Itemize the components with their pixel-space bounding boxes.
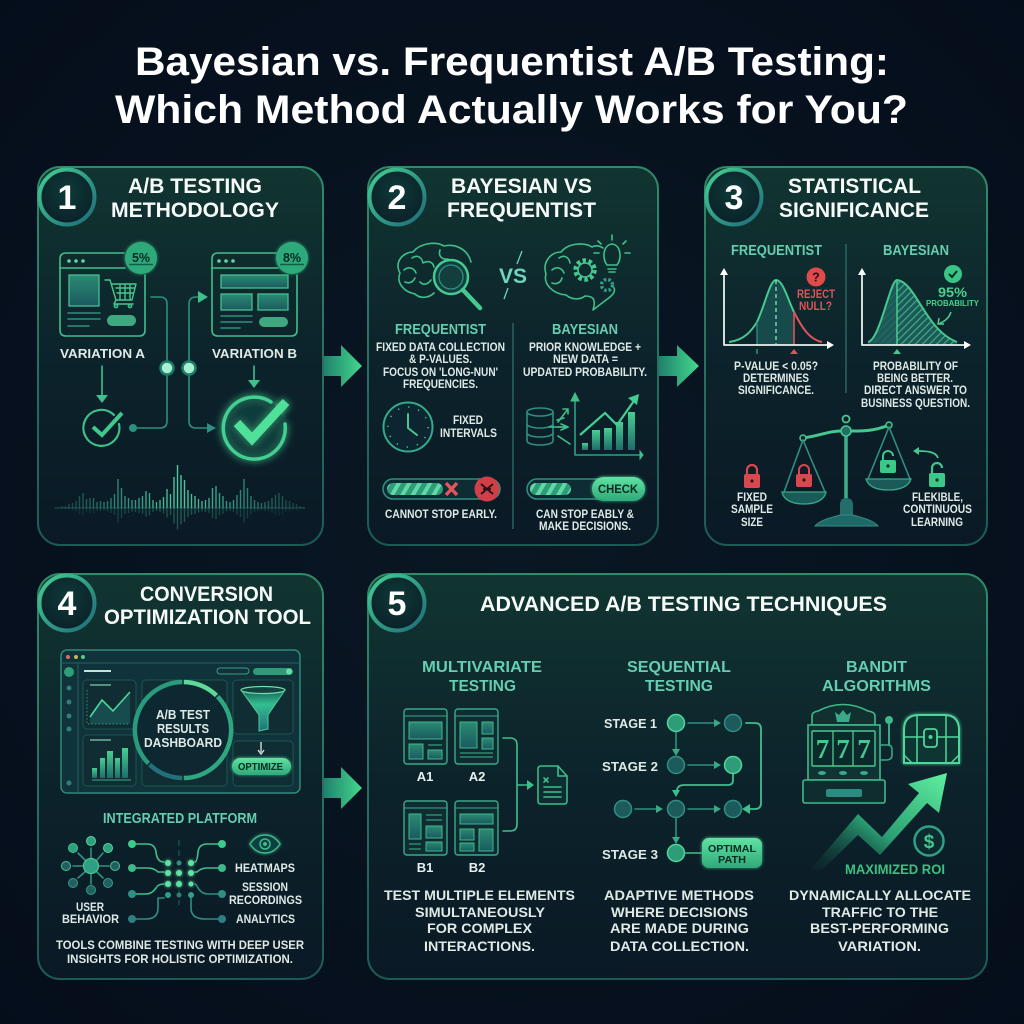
arrow: maximized ROI bbox=[810, 773, 947, 870]
divider bbox=[845, 244, 847, 393]
arrow: A down bbox=[96, 366, 108, 403]
labels: platform tools: HEATMAPS bbox=[235, 863, 295, 875]
icon: red lock bbox=[744, 465, 760, 488]
label: user behavior: USER bbox=[76, 902, 105, 914]
window A2 bbox=[455, 709, 498, 764]
subheads: BAYESIAN bbox=[883, 243, 949, 259]
heading: CONVERSION bbox=[140, 583, 273, 606]
label: fixed intervals bbox=[440, 415, 497, 440]
heading bbox=[104, 583, 311, 629]
caption: multivariate: FOR COMPLEX bbox=[427, 920, 533, 936]
divider bbox=[512, 323, 514, 529]
panel: Bayesian vs Frequentist bbox=[368, 167, 658, 545]
heading: FREQUENTIST bbox=[447, 199, 596, 222]
column heads: MULTIVARIATE bbox=[422, 659, 542, 676]
icon: eye bbox=[250, 835, 280, 853]
icon: brain with gears and bulb bbox=[545, 235, 630, 310]
callout: reject null: NULL? bbox=[799, 301, 832, 313]
caption: fixed sample size: SAMPLE bbox=[731, 504, 773, 516]
label: user behavior bbox=[62, 902, 120, 926]
subheads: FREQUENTIST bbox=[731, 243, 822, 259]
frequentist description: FOCUS ON 'LONG-NUN' bbox=[383, 367, 498, 379]
callout: optimal path bbox=[702, 838, 762, 868]
badge: 5% bbox=[125, 242, 157, 274]
callout: reject null: REJECT bbox=[797, 289, 835, 301]
mini chart: bars bbox=[90, 740, 131, 780]
icon: shopping cart bbox=[105, 280, 136, 308]
icon: slot machine: 7 bbox=[836, 734, 850, 764]
icon: treasure chest bbox=[904, 715, 959, 763]
labels: platform tools bbox=[229, 863, 302, 926]
badge 2 bbox=[370, 170, 424, 224]
heading: METHODOLOGY bbox=[111, 199, 279, 222]
subhead: integrated platform: INTEGRATED PLATFORM bbox=[103, 811, 257, 827]
results ring: A/B TEST bbox=[156, 707, 210, 722]
heading bbox=[111, 175, 279, 222]
column heads: SEQUENTIAL bbox=[627, 659, 731, 676]
caption: sequential: WHERE DECISIONS bbox=[611, 904, 748, 920]
arrow: B down bbox=[248, 366, 260, 388]
heading: STATISTICAL bbox=[788, 175, 921, 198]
column heads: TESTING bbox=[645, 678, 713, 695]
caption: sequential: ADAPTIVE METHODS bbox=[604, 887, 754, 903]
caption: TOOLS COMBINE TESTING WITH DEEP USER bbox=[56, 940, 305, 952]
callout: optimal path: OPTIMAL bbox=[708, 843, 757, 855]
label: variation A: VARIATION A bbox=[60, 346, 146, 361]
column heads bbox=[422, 659, 931, 695]
column heads: BANDIT bbox=[846, 659, 907, 676]
connector: merge bbox=[503, 738, 534, 831]
chart: rising bars bbox=[571, 393, 643, 459]
label: variation B: VARIATION B bbox=[212, 346, 297, 361]
mini chart: line bbox=[87, 685, 130, 724]
icon: green lock in pan bbox=[880, 451, 896, 473]
bayesian caption: DIRECT ANSWER TO bbox=[864, 385, 967, 397]
arrow: to optimize bbox=[258, 742, 264, 754]
caption: can stop: MAKE DECISIONS. bbox=[539, 521, 631, 533]
arrow: curved to scale bbox=[913, 447, 938, 458]
labels: variants: B1 bbox=[417, 860, 433, 875]
heading: ADVANCED A/B TESTING TECHNIQUES bbox=[480, 593, 887, 616]
caption: can stop bbox=[536, 509, 634, 533]
heading bbox=[447, 175, 596, 222]
icon: user behavior network bbox=[62, 836, 120, 894]
frequentist description: FREQUENTIST bbox=[395, 322, 486, 338]
caption: can stop: CAN STOP EABLY & bbox=[536, 509, 634, 521]
browser: variation A bbox=[60, 253, 145, 336]
icon: data hub bbox=[128, 840, 226, 923]
labels: variants: A2 bbox=[469, 769, 485, 784]
title: Which Method Actually Works for You? bbox=[115, 88, 908, 132]
icon: database with arrows bbox=[527, 408, 570, 445]
window B1 bbox=[404, 801, 447, 855]
icon: dollar: $ bbox=[924, 832, 935, 853]
badge: 8%: 8% bbox=[283, 251, 301, 265]
progress bar: check: CHECK bbox=[598, 484, 639, 496]
badge 2: 2 bbox=[388, 179, 406, 217]
caption: flexible: FLEKIBLE, bbox=[912, 492, 963, 504]
caption: sequential: DATA COLLECTION. bbox=[610, 938, 749, 954]
connector: A to result bbox=[129, 297, 174, 432]
label: user behavior: BEHAVIOR bbox=[62, 914, 120, 926]
frequentist caption: P-VALUE < 0.05? bbox=[734, 361, 818, 373]
waveform chart bbox=[55, 465, 305, 530]
icon: funnel bbox=[241, 686, 285, 731]
callout: optimal path: PATH bbox=[718, 854, 746, 866]
frequentist caption bbox=[734, 361, 818, 397]
heading: BAYESIAN VS bbox=[451, 175, 592, 198]
caption: INSIGHTS FOR HOLISTIC OPTIMIZATION. bbox=[67, 954, 293, 966]
caption: flexible: LEARNING bbox=[911, 517, 963, 529]
caption: multivariate bbox=[384, 887, 575, 954]
caption: bandit: BEST-PERFORMING bbox=[810, 920, 949, 936]
callout: 95% probability: 95% bbox=[938, 284, 968, 300]
labels: variants: B2 bbox=[469, 860, 485, 875]
caption: fixed sample size: SIZE bbox=[741, 517, 763, 529]
callout: reject null: ? bbox=[812, 270, 820, 284]
labels: platform tools: SESSION bbox=[242, 882, 288, 894]
progress bar: check bbox=[527, 477, 645, 501]
icon: big check bbox=[223, 397, 286, 459]
badge 3 bbox=[706, 170, 762, 224]
frequentist description: FIXED DATA COLLECTION bbox=[376, 342, 505, 354]
label: fixed intervals: FIXED bbox=[453, 415, 483, 427]
caption: flexible bbox=[903, 492, 972, 529]
frequentist description: FREQUENCIES. bbox=[403, 379, 478, 391]
arrow: panel 4 to panel 5 bbox=[323, 767, 362, 809]
caption: fixed sample size: FIXED bbox=[737, 492, 767, 504]
caption bbox=[56, 940, 305, 966]
icon: green lock bbox=[929, 463, 945, 487]
caption: multivariate: TEST MULTIPLE ELEMENTS bbox=[384, 887, 575, 903]
icon: balance scale bbox=[782, 416, 911, 526]
panel: advanced techniques bbox=[368, 574, 987, 979]
badge 5 bbox=[370, 576, 424, 630]
panel: conversion optimization tool bbox=[38, 574, 323, 979]
label: maximized ROI: MAXIMIZED ROI bbox=[845, 862, 945, 877]
labels: platform tools: ANALYTICS bbox=[236, 914, 295, 926]
VS label: VS bbox=[499, 265, 527, 288]
caption: sequential bbox=[604, 887, 754, 954]
badge: 8% bbox=[276, 242, 308, 274]
labels: platform tools: RECORDINGS bbox=[229, 895, 302, 907]
bayesian description: UPDATED PROBABILITY. bbox=[523, 367, 647, 379]
heading: OPTIMIZATION TOOL bbox=[104, 606, 311, 629]
results ring: RESULTS bbox=[157, 721, 209, 736]
heading: A/B TESTING bbox=[128, 175, 262, 198]
icon: slot machine: 7 bbox=[816, 734, 829, 764]
chart: bayesian posterior bbox=[858, 268, 971, 354]
bayesian caption: BEING BETTER. bbox=[877, 373, 953, 385]
caption: bandit: DYNAMICALLY ALLOCATE bbox=[789, 887, 971, 903]
results ring: DASHBOARD bbox=[144, 735, 222, 750]
progress bar: cannot stop bbox=[383, 476, 500, 502]
arrow: panel 2 to panel 3 bbox=[658, 345, 699, 387]
button: optimize bbox=[232, 758, 291, 775]
heading: SIGNIFICANCE bbox=[779, 199, 929, 222]
caption: multivariate: INTERACTIONS. bbox=[424, 938, 535, 954]
window B2 bbox=[455, 801, 498, 855]
callout: 95% probability: PROBABILITY bbox=[926, 299, 980, 308]
badge 4: 4 bbox=[58, 585, 77, 623]
title: Bayesian vs. Frequentist A/B Testing: bbox=[135, 40, 889, 84]
bayesian description bbox=[523, 322, 647, 379]
icon: document bbox=[538, 766, 567, 804]
label: fixed intervals: INTERVALS bbox=[440, 428, 497, 440]
dashboard window bbox=[61, 650, 300, 793]
bayesian description: NEW DATA = bbox=[553, 354, 618, 366]
icon: brain with magnifier bbox=[398, 243, 480, 308]
caption: cannot stop: CANNOT STOP EARLY. bbox=[385, 509, 497, 521]
caption: fixed sample size bbox=[731, 492, 773, 529]
icon: dollar bbox=[914, 826, 944, 856]
caption: bandit: VARIATION. bbox=[838, 938, 921, 954]
frequentist description bbox=[376, 322, 505, 391]
bayesian caption bbox=[861, 361, 970, 410]
browser: variation B bbox=[212, 253, 297, 336]
results ring bbox=[135, 679, 231, 781]
VS label bbox=[499, 251, 527, 299]
column heads: TESTING bbox=[449, 678, 516, 695]
badge 1: 1 bbox=[58, 179, 76, 217]
flow: sequential stages: STAGE 2 bbox=[602, 759, 658, 774]
flow: sequential stages: STAGE 1 bbox=[604, 716, 657, 731]
caption: flexible: CONTINUOUS bbox=[903, 504, 972, 516]
column heads: ALGORITHMS bbox=[822, 678, 931, 695]
chart: frequentist bell curve bbox=[720, 268, 834, 354]
arrow: panel 1 to panel 2 bbox=[323, 345, 362, 387]
badge 3: 3 bbox=[725, 179, 743, 217]
badge: 5%: 5% bbox=[132, 251, 150, 265]
badge 1 bbox=[40, 170, 94, 224]
panel: A/B testing methodology bbox=[38, 167, 323, 545]
button: optimize: OPTIMIZE bbox=[238, 761, 283, 773]
window A1 bbox=[404, 709, 447, 764]
icon: clock bbox=[384, 402, 432, 452]
callout: reject null bbox=[797, 268, 835, 313]
bayesian caption: BUSINESS QUESTION. bbox=[861, 398, 970, 410]
caption: bandit: TRAFFIC TO THE bbox=[822, 904, 938, 920]
bayesian description: BAYESIAN bbox=[552, 322, 618, 338]
frequentist description: & P-VALUES. bbox=[409, 354, 472, 366]
icon: small check bbox=[83, 410, 122, 446]
icon: slot machine bbox=[803, 704, 893, 803]
badge 4 bbox=[40, 576, 94, 630]
bayesian description: PRIOR KNOWLEDGE + bbox=[529, 342, 641, 354]
heading bbox=[779, 175, 929, 222]
caption: multivariate: SIMULTANEOUSLY bbox=[415, 904, 546, 920]
frequentist caption: SIGNIFICANCE. bbox=[738, 385, 814, 397]
panel: statistical significance bbox=[705, 167, 987, 545]
title bbox=[115, 40, 908, 132]
caption: sequential: ARE MADE DURING bbox=[610, 920, 749, 936]
connector: B branch bbox=[182, 291, 216, 433]
subheads bbox=[731, 243, 949, 259]
bayesian caption: PROBABILITY OF bbox=[873, 361, 958, 373]
icon: slot machine: 7 bbox=[857, 734, 871, 764]
icon: red lock in pan bbox=[796, 465, 812, 487]
labels: variants: A1 bbox=[417, 769, 433, 784]
flow: sequential stages bbox=[602, 714, 761, 862]
badge 5: 5 bbox=[388, 585, 406, 623]
caption: bandit bbox=[789, 887, 971, 954]
flow: sequential stages: STAGE 3 bbox=[602, 847, 658, 862]
callout: 95% probability bbox=[926, 265, 980, 324]
frequentist caption: DETERMINES bbox=[743, 373, 809, 385]
labels: variants bbox=[417, 769, 485, 875]
